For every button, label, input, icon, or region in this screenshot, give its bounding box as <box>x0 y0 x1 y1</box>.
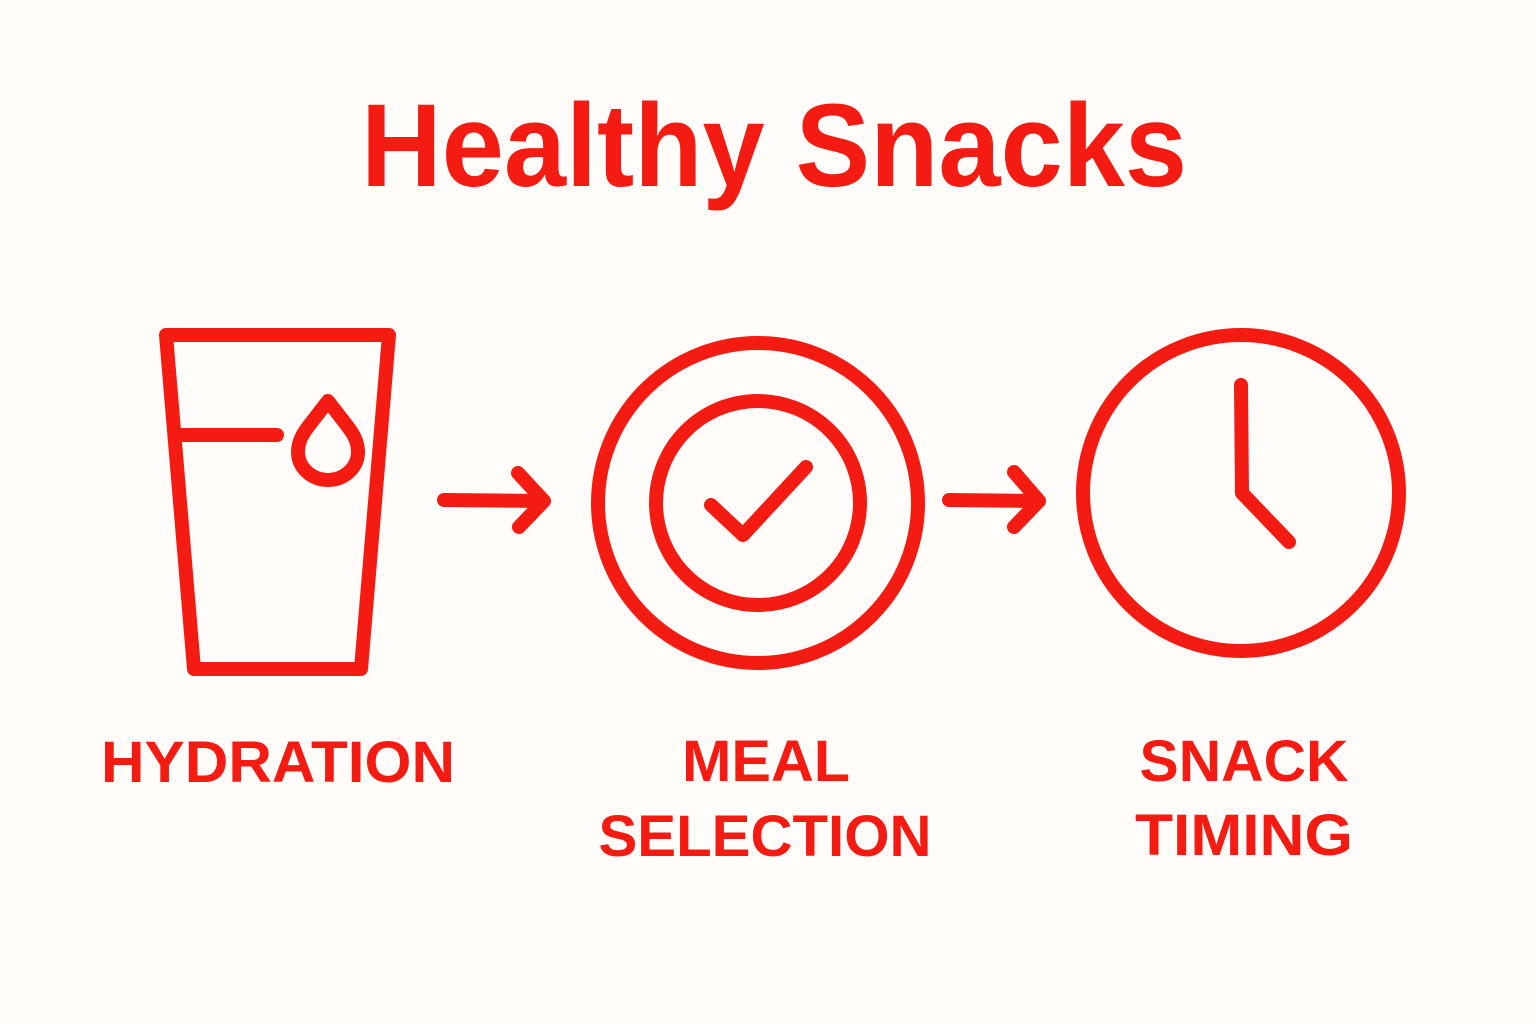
icon: plate with check <box>598 343 918 663</box>
label: snack timing: SNACK <box>1140 729 1349 794</box>
label: meal selection: MEAL <box>682 729 850 794</box>
label: snack timing: TIMING <box>1135 803 1353 868</box>
label: hydration: HYDRATION <box>101 730 455 795</box>
title: Healthy Snacks <box>361 80 1187 212</box>
icon: glass of water <box>166 335 389 669</box>
icon: water drop <box>298 401 358 480</box>
label: snack timing <box>1135 729 1353 868</box>
label: meal selection: SELECTION <box>598 804 932 869</box>
arrow: meal to snack timing <box>949 472 1039 527</box>
label: meal selection <box>598 729 932 869</box>
arrow: hydration to meal <box>444 473 544 527</box>
icon: clock <box>1083 335 1399 651</box>
